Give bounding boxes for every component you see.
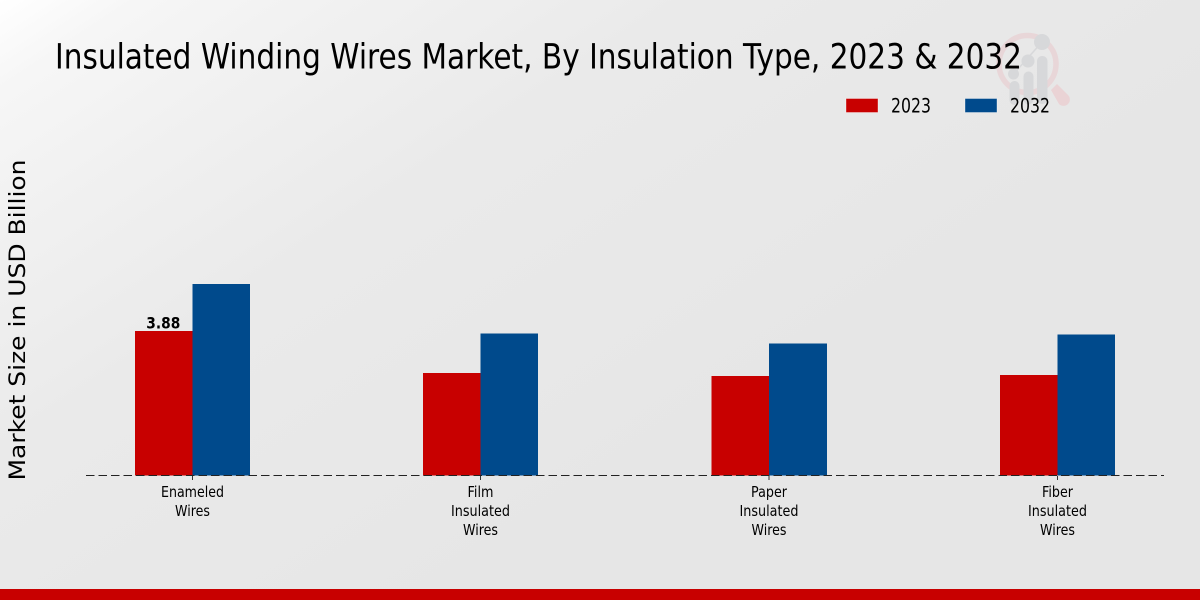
- legend label 2032: 2032: [1010, 94, 1050, 118]
- bar: Film Insulated Wires 2023: [423, 373, 480, 476]
- x-axis label: Fiber Insulated Wires: [1028, 483, 1087, 539]
- legend: [846, 94, 1050, 118]
- x-axis label: Fiber Insulated Wires: Wires: [1040, 521, 1075, 539]
- x-axis label: Fiber Insulated Wires: Insulated: [1028, 502, 1087, 520]
- group: Film Insulated Wires: [423, 334, 538, 476]
- x-axis label: Paper Insulated Wires: Paper: [751, 483, 788, 501]
- group: Paper Insulated Wires: [712, 344, 827, 476]
- x-axis label: Enameled Wires: [161, 483, 224, 520]
- x-axis label: Enameled Wires: Enameled: [161, 483, 224, 501]
- bar chart: [86, 284, 1164, 480]
- x-axis label: Fiber Insulated Wires: Fiber: [1042, 483, 1074, 501]
- bar: Fiber Insulated Wires 2032: [1058, 334, 1115, 476]
- legend swatch 2032: [965, 98, 997, 112]
- bar: Fiber Insulated Wires 2023: [1000, 375, 1058, 476]
- bar: Enameled Wires 2032: [192, 284, 250, 476]
- group: Enameled Wires: [135, 284, 250, 476]
- x-axis label: Paper Insulated Wires: [740, 483, 798, 539]
- x-axis label: Paper Insulated Wires: Wires: [752, 521, 786, 539]
- value label 3.88: 3.88: [146, 313, 180, 332]
- bar: Enameled Wires 2023: [135, 331, 192, 476]
- x-axis label: Film Insulated Wires: Wires: [463, 521, 498, 539]
- legend swatch 2023: [846, 98, 878, 112]
- bottom red band: [0, 589, 1200, 600]
- x-axis label: Enameled Wires: Wires: [175, 502, 210, 520]
- bar: Paper Insulated Wires 2032: [769, 344, 827, 476]
- x-axis label: Paper Insulated Wires: Insulated: [740, 502, 798, 520]
- x-axis label: Film Insulated Wires: Film: [468, 483, 494, 501]
- y-axis title: Market Size in USD Billion: [5, 160, 31, 480]
- bar: Film Insulated Wires 2032: [480, 334, 538, 476]
- icon: watermark magnifier with bars: [999, 34, 1070, 106]
- legend label 2023: 2023: [891, 94, 931, 118]
- bar: Paper Insulated Wires 2023: [712, 376, 769, 476]
- group: Fiber Insulated Wires: [1000, 334, 1115, 476]
- x-axis label: Film Insulated Wires: [451, 483, 510, 539]
- x-axis label: Film Insulated Wires: Insulated: [451, 502, 510, 520]
- title: Insulated Winding Wires Market, By Insulation Type, 2023 & 2032: [55, 38, 1022, 78]
